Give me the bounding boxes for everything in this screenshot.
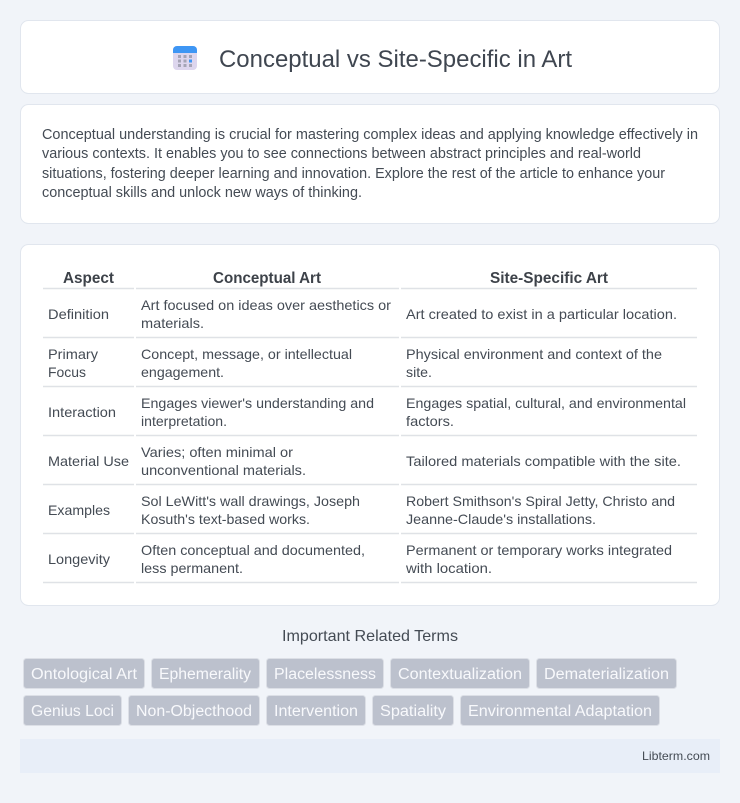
table header: Conceptual Art xyxy=(213,270,321,287)
tag: Contextualization: Contextualization xyxy=(398,666,522,683)
row: primary focus: Focus xyxy=(48,364,86,380)
header panel xyxy=(20,20,720,94)
intro text: situations, fostering deeper learning and innovation. Explore the rest of the article to enhance your xyxy=(42,166,665,182)
row: longevity: Longevity xyxy=(48,551,110,567)
tag: Environmental Adaptation: Environmental Adaptation xyxy=(468,703,652,720)
row: examples: Robert Smithson's Spiral Jetty, Christo and xyxy=(406,493,675,509)
tag: Spatiality: Spatiality xyxy=(380,703,446,720)
tag: Dematerialization: Dematerialization xyxy=(544,666,669,683)
row: interaction: factors. xyxy=(406,413,454,429)
row: primary focus: site. xyxy=(406,364,432,380)
row: primary focus xyxy=(48,346,662,380)
row: definition: Art created to exist in a particular location. xyxy=(406,306,677,322)
row: interaction: Interaction xyxy=(48,404,116,420)
row: definition xyxy=(48,297,677,331)
row: interaction: interpretation. xyxy=(141,413,227,429)
row: longevity: Often conceptual and documented, xyxy=(141,542,365,558)
tag: Dematerialization xyxy=(536,658,676,688)
row: material use: Material Use xyxy=(48,453,129,469)
tag list xyxy=(24,658,676,726)
tag: Placelessness xyxy=(266,658,384,688)
row: primary focus: engagement. xyxy=(141,364,224,380)
footer bar xyxy=(20,739,720,773)
panel: comparison table xyxy=(20,244,720,606)
intro text: Conceptual understanding is crucial for mastering complex ideas and applying knowledge effectively in xyxy=(42,127,698,143)
tag: Placelessness: Placelessness xyxy=(274,666,376,683)
related terms heading: Important Related Terms xyxy=(282,628,458,645)
row: primary focus: Primary xyxy=(48,346,98,362)
tag: Genius Loci xyxy=(24,696,122,726)
tag: Non-Objecthood: Non-Objecthood xyxy=(136,703,252,720)
row: examples: Jeanne-Claude's installations. xyxy=(406,511,596,527)
tag: Non-Objecthood xyxy=(128,696,260,726)
row: material use xyxy=(48,444,681,478)
tag: Ontological Art xyxy=(24,658,144,688)
tag: Contextualization xyxy=(390,658,530,688)
row: interaction xyxy=(48,395,686,429)
row: examples: Kosuth's text-based works. xyxy=(141,511,310,527)
intro text: conceptual skills and unlock new ways of thinking. xyxy=(42,185,362,201)
row: examples xyxy=(48,493,675,527)
table header: Aspect xyxy=(63,270,114,287)
title: Conceptual vs Site-Specific in Art xyxy=(219,46,572,73)
row: primary focus: Physical environment and context of the xyxy=(406,346,662,362)
row: interaction: Engages viewer's understanding and xyxy=(141,395,374,411)
row: definition: materials. xyxy=(141,315,204,331)
row: material use: Varies; often minimal or xyxy=(141,444,293,460)
tag: Genius Loci: Genius Loci xyxy=(31,703,114,720)
intro text xyxy=(42,127,698,201)
icon: calendar grid xyxy=(173,46,197,70)
row: interaction: Engages spatial, cultural, and environmental xyxy=(406,395,686,411)
tag: Intervention: Intervention xyxy=(274,703,358,720)
footer credit: Libterm.com xyxy=(642,749,710,763)
row: examples: Sol LeWitt's wall drawings, Joseph xyxy=(141,493,360,509)
tag: Ephemerality: Ephemerality xyxy=(159,666,251,683)
panel: introduction xyxy=(20,104,720,224)
row: primary focus: Concept, message, or intellectual xyxy=(141,346,352,362)
row: longevity: less permanent. xyxy=(141,560,243,576)
row: definition: Art focused on ideas over aesthetics or xyxy=(141,297,391,313)
intro text: various contexts. It enables you to see connections between abstract principles and real-world xyxy=(42,146,641,162)
row: longevity: with location. xyxy=(405,560,492,576)
tag: Intervention xyxy=(266,696,366,726)
row: examples: Examples xyxy=(48,502,110,518)
row: longevity: Permanent or temporary works integrated xyxy=(406,542,672,558)
tag: Spatiality xyxy=(372,696,454,726)
tag: Ephemerality xyxy=(152,658,260,688)
tag: Ontological Art: Ontological Art xyxy=(31,666,138,683)
table header xyxy=(63,270,608,287)
row: material use: Tailored materials compatible with the site. xyxy=(406,453,681,469)
row: longevity xyxy=(48,542,672,576)
tag: Environmental Adaptation xyxy=(460,696,660,726)
table header: Site-Specific Art xyxy=(490,270,608,287)
row: definition: Definition xyxy=(48,306,109,322)
row: material use: unconventional materials. xyxy=(141,462,306,478)
